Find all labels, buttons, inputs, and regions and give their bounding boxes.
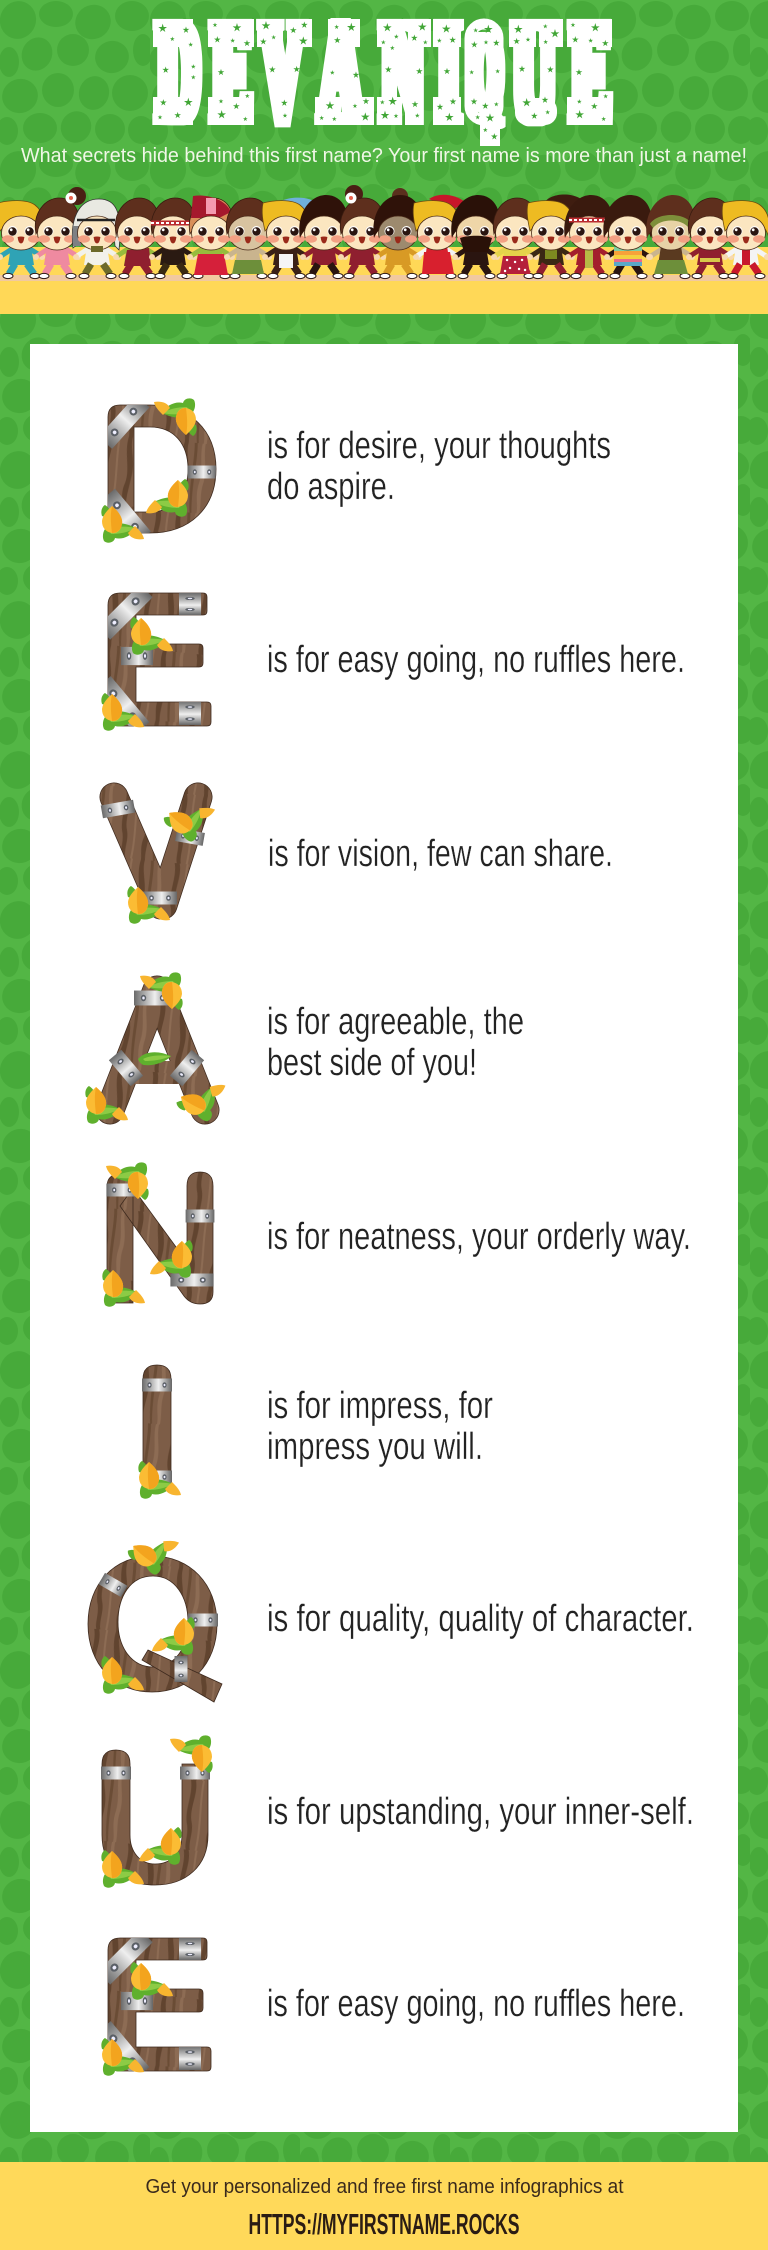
text: A lines: best side of you!	[267, 1042, 477, 1084]
subtitle: What secrets hide behind this first name? Your first name is more than just a name!	[21, 145, 747, 167]
child: blond, olive tunic	[527, 194, 589, 279]
wooden letter E	[97, 1929, 211, 2079]
child: green woven headband, grass skirt	[646, 195, 695, 279]
child: blond, red and white dress	[722, 201, 768, 279]
child: maroon with flower	[338, 185, 386, 279]
child: ninja with beard	[451, 195, 500, 279]
text: V line: is for vision, few can share.	[268, 833, 613, 875]
letter row I	[138, 1365, 493, 1499]
wooden letter I	[138, 1365, 181, 1499]
child: white headdress	[72, 199, 121, 279]
letter row Q	[88, 1521, 694, 1702]
letter row E (second)	[97, 1929, 685, 2079]
letter row A	[85, 972, 524, 1124]
child: tall dark hair, maroon	[299, 195, 348, 279]
letter row D	[99, 395, 611, 543]
wooden letter V	[101, 788, 218, 924]
panel: white letter panel	[30, 344, 738, 2132]
child: maroon with green stripe and headband	[564, 195, 613, 279]
child: blond with white apron	[262, 198, 318, 279]
text: I lines: is for impress, for	[267, 1385, 493, 1427]
wooden letter U	[101, 1735, 213, 1888]
child: green and maroon robe	[113, 198, 161, 279]
footer URL: HTTPS://MYFIRSTNAME.ROCKS	[248, 2209, 520, 2241]
title	[153, 0, 612, 156]
letter row U	[101, 1735, 694, 1888]
letter row N	[102, 1162, 691, 1307]
text: D line: do aspire.	[267, 466, 395, 508]
letter row V	[101, 788, 613, 924]
row of cartoon children in world costumes	[0, 185, 768, 279]
wooden letter A	[85, 972, 229, 1124]
text: I lines: impress you will.	[267, 1426, 483, 1468]
child: black outfit with headband	[149, 198, 197, 279]
wooden letter E	[97, 584, 211, 734]
child: striped shirt	[603, 195, 652, 279]
child: grass skirt	[224, 198, 272, 279]
child: red hat and red skirt	[187, 196, 235, 279]
footer call to action: Get your personalized and free first name infographics at	[146, 2176, 624, 2198]
yellow band behind the characters	[0, 247, 768, 314]
wooden letter N	[102, 1162, 214, 1307]
child: dark skin, orange wrap	[373, 188, 422, 279]
wooden letter D	[99, 395, 216, 543]
child: pink kimono with flower	[33, 187, 86, 279]
text: A lines: is for agreeable, the	[267, 1001, 524, 1043]
child: maroon robe with cross scar	[686, 198, 734, 279]
footer band	[0, 2162, 768, 2250]
child: blond with red hat and red dress	[413, 195, 465, 279]
wooden letter Q	[88, 1521, 222, 1702]
title: Q	[469, 10, 501, 132]
child: red dotted skirt	[491, 198, 539, 279]
letter row E	[97, 584, 685, 734]
text: D line: is for desire, your thoughts	[267, 425, 611, 467]
child: blue overalls	[0, 201, 45, 279]
